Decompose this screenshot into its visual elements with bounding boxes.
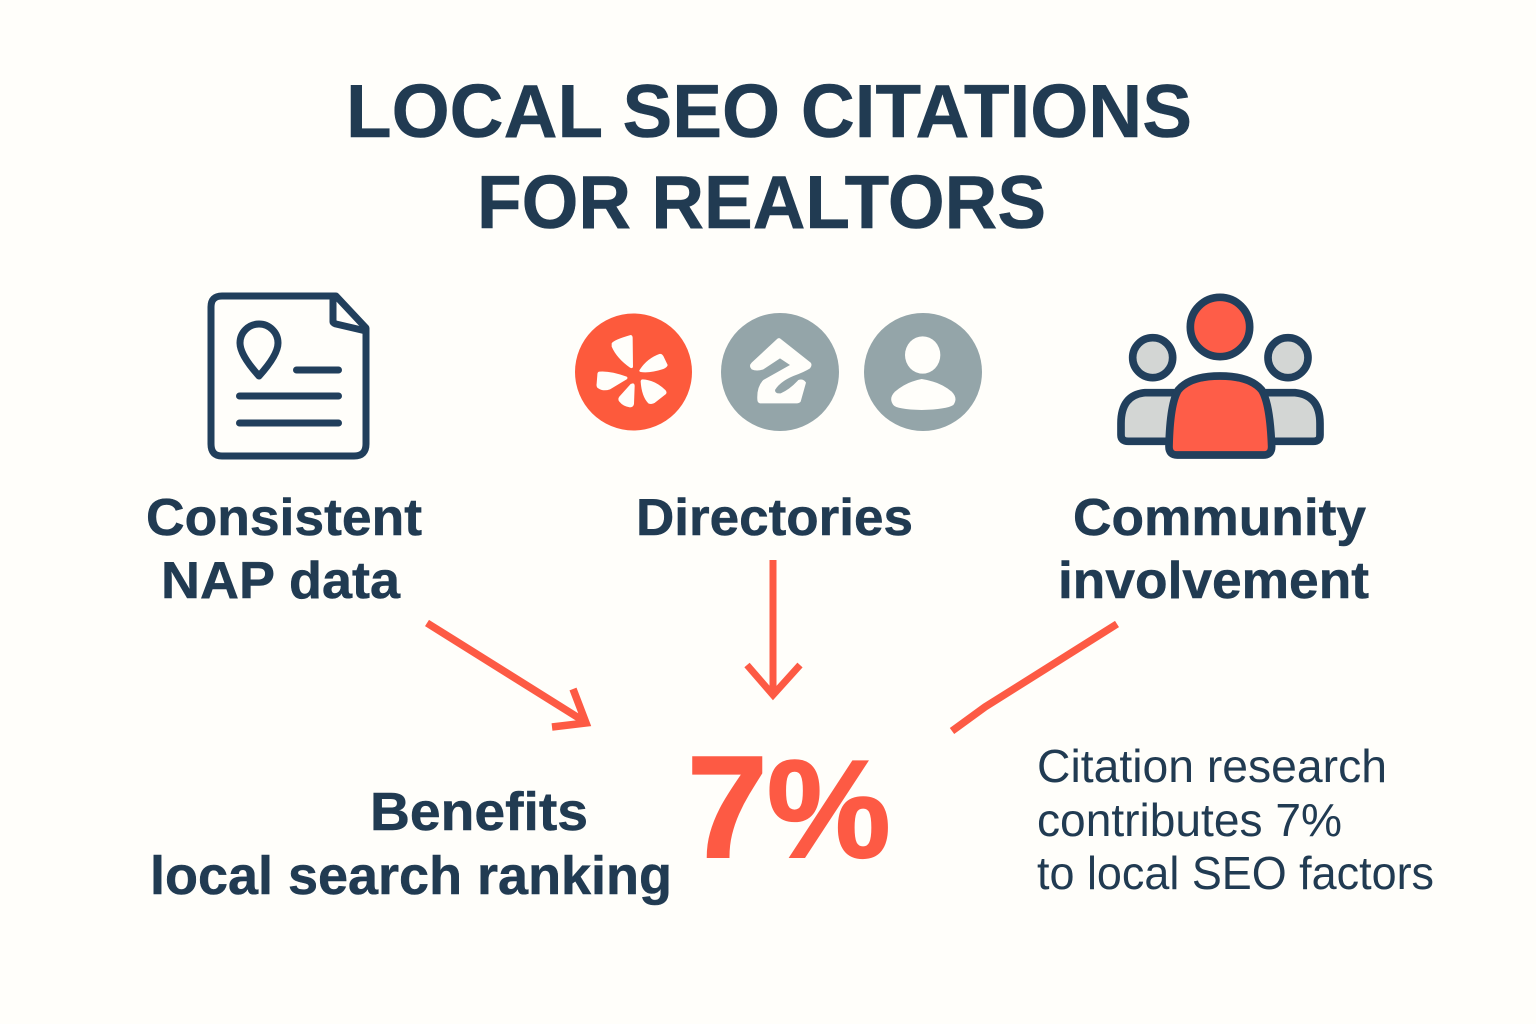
arrow: Community involvement to 7% bbox=[952, 624, 1117, 731]
arrow: NAP data to 7% bbox=[427, 623, 586, 727]
arrow: Directories to 7% bbox=[747, 560, 800, 695]
label: Benefits local search ranking: Benefits bbox=[370, 782, 588, 842]
label: Consistent NAP data: Consistent bbox=[146, 489, 422, 547]
label: Directories: Directories bbox=[636, 489, 913, 547]
text: citation research note: to local SEO factors bbox=[1037, 847, 1434, 899]
icon: community group bbox=[1121, 297, 1320, 455]
label: Consistent NAP data: NAP data bbox=[161, 552, 401, 610]
label: Community involvement bbox=[1058, 489, 1369, 610]
label: Benefits local search ranking: local search ranking bbox=[150, 846, 672, 906]
label: Community involvement: Community bbox=[1073, 489, 1366, 547]
text: citation research note bbox=[1037, 740, 1434, 899]
text: citation research note: Citation research bbox=[1037, 740, 1387, 792]
text: citation research note: contributes 7% bbox=[1037, 794, 1342, 846]
title: LOCAL SEO CITATIONS bbox=[346, 69, 1192, 153]
label: Benefits local search ranking bbox=[150, 782, 672, 906]
label: Community involvement: involvement bbox=[1058, 552, 1369, 610]
statistic: 7%: 7 bbox=[687, 726, 768, 888]
title: FOR REALTORS bbox=[477, 160, 1046, 244]
title bbox=[346, 69, 1192, 244]
icon: document with location pin bbox=[211, 296, 366, 456]
icon: profile directory badge bbox=[864, 313, 982, 431]
icon: Yelp directory badge bbox=[575, 314, 692, 430]
icon: Zillow directory badge bbox=[721, 313, 839, 431]
label: Consistent NAP data bbox=[146, 489, 422, 610]
statistic: 7%: % bbox=[767, 732, 891, 887]
